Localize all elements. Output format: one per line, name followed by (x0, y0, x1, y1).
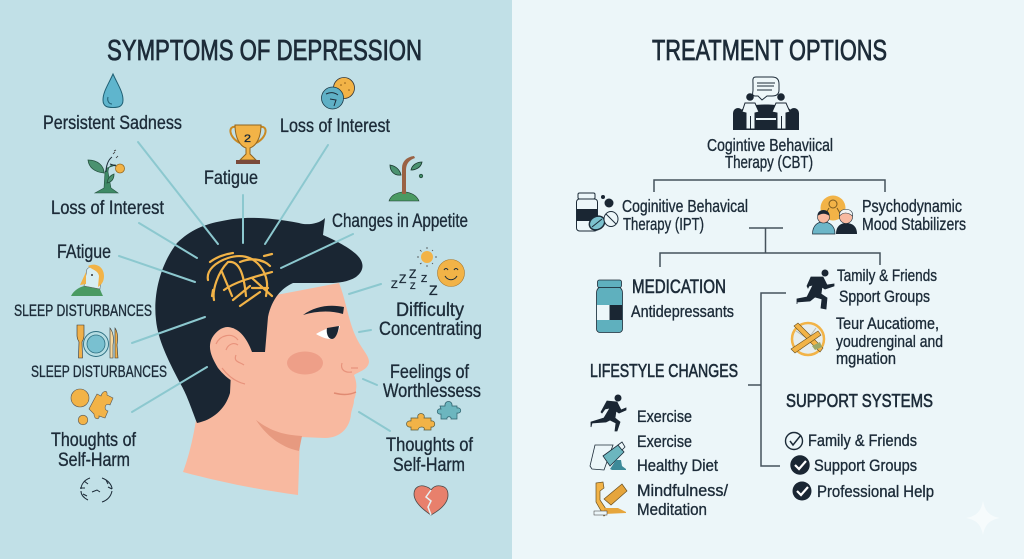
text: mindfulness meditation (637, 482, 728, 519)
connector: CBT branch (654, 180, 885, 192)
icon: runner upper (797, 270, 834, 309)
label: thoughts of self-harm right: Thoughts of (386, 434, 473, 456)
icon: sparkle watermark (966, 501, 1000, 535)
brain scribble (208, 253, 272, 306)
eye (316, 326, 340, 339)
illustration: head profile (155, 218, 369, 495)
icon: two people with orange circle (812, 196, 857, 234)
text: garbled treatment note: youdrenginal and (836, 333, 943, 351)
text: family and friends, support groups: Spport Groups (839, 288, 930, 306)
text: garbled treatment note: Teur Aucatiome, (836, 315, 939, 333)
icon: tired profile (71, 265, 104, 296)
icon: sleep z's, sun and smile: Z (410, 281, 416, 291)
text: antidepressants: Antidepressants (631, 303, 734, 321)
heading: medication: MEDICATION (632, 277, 726, 298)
icon: sleep z's, sun and smile: Z (391, 279, 398, 291)
hair (155, 218, 362, 423)
text: psychodynamic mood stabilizers: Mood Stabilizers (862, 214, 966, 234)
cheek (287, 352, 323, 374)
icon: trophy (230, 125, 266, 164)
label: changes in appetite: Changes in Appetite (332, 211, 468, 232)
label: feelings of worthlessness (383, 361, 481, 402)
label: loss of interest left: Loss of Interest (51, 197, 164, 219)
label: thoughts of self-harm left: Self-Harm (58, 449, 130, 471)
text: garbled treatment note (836, 315, 943, 368)
icon: runner (591, 394, 626, 431)
label: persistent sadness: Persistent Sadness (43, 112, 182, 134)
icon: bottle and scale (590, 442, 626, 470)
icon: broken heart (414, 486, 448, 515)
icon: sleep z's, sun and smile: Z (421, 274, 427, 285)
icon: sleep z's, sun and smile (391, 247, 464, 298)
icon: sad sprout (389, 156, 423, 201)
label: thoughts of self-harm left: Thoughts of (51, 429, 136, 451)
connector lines: symptoms to head (119, 142, 390, 431)
label: difficulty concentrating: Difficulty (396, 299, 464, 321)
heading: lifestyle changes: LIFESTYLE CHANGES (590, 361, 738, 381)
text: cognitive behavioral therapy CBT: Therapy (CBT) (725, 152, 813, 172)
label: sleep disturbances upper: SLEEP DISTURBANCES (14, 301, 152, 320)
label: sleep disturbances lower: SLEEP DISTURBANCES (31, 362, 167, 381)
text: cognitive behavioral therapy CBT: Cogintive Behaviical (707, 135, 833, 155)
panel: symptoms background (0, 0, 512, 559)
head skin (183, 283, 369, 495)
icon: wilted sprout with coin (88, 150, 124, 193)
icon: sleep z's, sun and smile: Z (429, 282, 438, 298)
text: cognitive behavioral therapy CBT (707, 135, 833, 172)
text: garbled treatment note: mgнation (836, 350, 896, 368)
text: psychodynamic mood stabilizers (862, 196, 966, 234)
label: difficulty concentrating (379, 299, 482, 340)
icon: meditation tool (594, 482, 627, 516)
text: mindfulness meditation: Meditation (637, 501, 707, 519)
icon: circles and puzzle piece (71, 389, 113, 425)
jaw shadow (256, 420, 302, 451)
label: fatigue left: FAtigue (57, 241, 111, 263)
label: fatigue center: Fatigue (204, 167, 258, 189)
title: symptoms of depression: SYMPTOMS OF DEPRESSION (107, 35, 422, 67)
label: loss of interest top: Loss of Interest (280, 115, 390, 137)
label: thoughts of self-harm left (51, 429, 136, 471)
text: exercise and healthy diet: Healthy Diet (637, 457, 718, 475)
text: exercise: Exercise (637, 408, 692, 426)
label: thoughts of self-harm right: Self-Harm (393, 454, 465, 476)
connector: right bracket (748, 293, 786, 466)
icon: outline check (786, 432, 802, 450)
eyebrow (303, 306, 344, 315)
text: therapy IPT: Therapy (IPT) (623, 214, 704, 234)
text: psychodynamic mood stabilizers: Psychodynamic (862, 196, 962, 216)
text: mindfulness meditation: Mindfulness/ (637, 482, 728, 500)
text: family and friends, support groups: Tamily & Friends (837, 267, 937, 285)
text: family and friends: Family & Friends (808, 432, 917, 450)
icon: therapy couch with speech bubble (733, 77, 799, 130)
text: therapy IPT: Coginitive Behavical (622, 196, 748, 216)
icon: moon and cookie (322, 78, 354, 109)
label: difficulty concentrating: Concentrating (379, 318, 482, 340)
text: professional help: Professional Help (817, 483, 934, 501)
label: feelings of worthlessness: Feelings of (390, 361, 469, 383)
icon: medication bottle (596, 280, 622, 332)
icon: broken circle face (80, 478, 112, 502)
icon: sleep z's, sun and smile: Z (399, 272, 406, 286)
icon: pill bottle and tablets (576, 193, 618, 233)
icon: crossed-out circle (791, 323, 824, 355)
connector: center tee and lower branch (660, 228, 880, 267)
panel: treatment background (512, 0, 1024, 559)
nose and mouth (342, 363, 358, 372)
text: family and friends, support groups (837, 267, 937, 306)
icon: puzzle pieces (406, 402, 461, 430)
text: support groups: Support Groups (814, 457, 917, 475)
heading: support systems: SUPPORT SYSTEMS (786, 391, 933, 411)
icon: sleep z's, sun and smile: Z (409, 267, 416, 281)
label: feelings of worthlessness: Worthlessess (383, 380, 481, 402)
label: thoughts of self-harm right (386, 434, 473, 476)
title: treatment options: TREATMENT OPTIONS (652, 35, 887, 67)
icon: filled check one (790, 455, 810, 475)
ear (210, 327, 254, 384)
text: exercise and healthy diet: Exercise (637, 433, 692, 451)
icon: water drop (103, 74, 123, 108)
icon: filled check two (792, 482, 812, 500)
icon: plate and cutlery (77, 325, 118, 358)
text: therapy IPT (622, 196, 748, 234)
icon: trophy: 2 (244, 133, 251, 145)
text: exercise and healthy diet (637, 433, 718, 475)
